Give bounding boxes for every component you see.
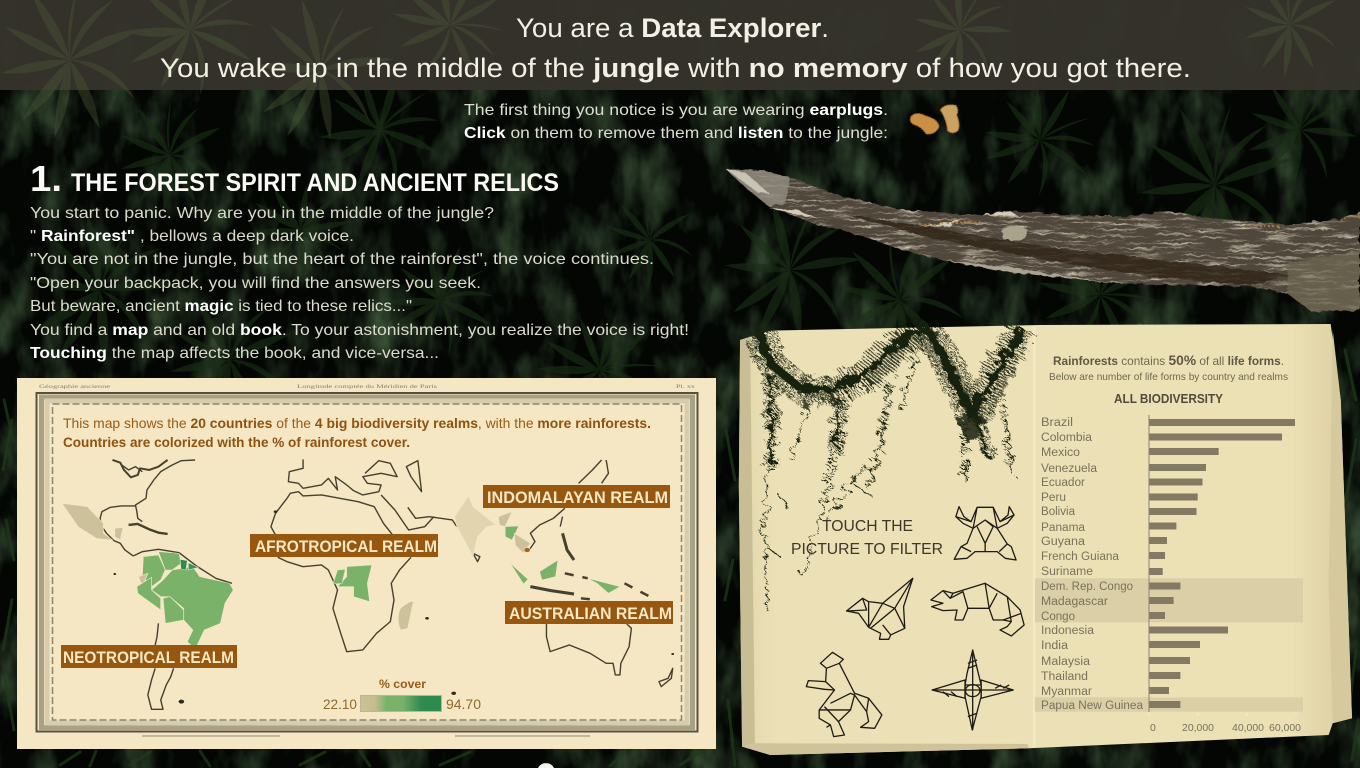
country labels: Madagascar xyxy=(1041,596,1108,608)
country labels: Suriname xyxy=(1041,566,1093,578)
country labels: Colombia xyxy=(1041,432,1093,444)
value axis: 40,000 xyxy=(1232,722,1264,734)
story text: You find a map and an old book. To your astonishment, you realize the voice is right! xyxy=(30,322,689,339)
country labels: Mexico xyxy=(1041,447,1080,459)
map intro text: This map shows the 20 countries of the 4 big biodiversity realms, with the more rainforests. xyxy=(63,415,651,431)
countries xyxy=(62,496,620,649)
world map xyxy=(62,459,674,709)
value axis: 60,000 xyxy=(1269,722,1301,734)
value axis: 0 xyxy=(1150,722,1156,734)
country labels: French Guiana xyxy=(1041,551,1120,563)
story text xyxy=(30,205,689,362)
story text: You start to panic. Why are you in the middle of the jungle? xyxy=(30,205,494,222)
value axis xyxy=(1149,713,1301,734)
story text: "You are not in the jungle, but the heart of the rainforest", the voice continues. xyxy=(30,251,654,268)
title xyxy=(160,13,1191,83)
book heading: Rainforests contains 50% of all life forms. xyxy=(1053,352,1284,368)
intro text: earplugs xyxy=(464,102,888,142)
title: You are a Data Explorer. xyxy=(516,13,829,43)
country labels: Ecuador xyxy=(1041,477,1085,489)
intro text: earplugs: The first thing you notice is you are wearing earplugs . xyxy=(464,102,888,119)
country labels: Myanmar xyxy=(1041,686,1092,698)
icon: origami gorilla xyxy=(806,652,882,737)
legend: % cover: 94.70 xyxy=(446,697,481,712)
hanging moss xyxy=(754,327,1021,613)
story text: " Rainforest" , bellows a deep dark voice. xyxy=(30,228,354,245)
touch prompt xyxy=(791,518,943,558)
legend: % cover: % cover xyxy=(379,677,426,691)
country labels: Thailand xyxy=(1041,671,1088,683)
touch prompt: TOUCH THE xyxy=(822,518,913,535)
story text: But beware, ancient magic is tied to these relics..." xyxy=(30,298,412,315)
country labels: Malaysia xyxy=(1041,656,1091,668)
intro text: earplugs: Click on them to remove them and listen to the jungle: xyxy=(464,125,888,142)
section heading xyxy=(30,158,559,199)
country labels: Bolivia xyxy=(1041,506,1076,518)
bar chart: life forms by country xyxy=(1041,415,1301,734)
origami animals xyxy=(806,507,1024,737)
panel: open book xyxy=(726,169,1360,755)
panel: antique map xyxy=(17,378,716,749)
map intro text xyxy=(63,415,651,450)
icon: earplugs xyxy=(910,105,959,134)
map intro text: Countries are colorized with the % of rainforest cover. xyxy=(63,434,410,450)
legend: % cover xyxy=(323,677,481,712)
bars xyxy=(1149,419,1295,708)
country labels: Panama xyxy=(1041,522,1086,534)
label: neotropical realm: NEOTROPICAL REALM xyxy=(63,648,234,667)
icon: origami frog xyxy=(954,507,1016,560)
book heading: ALL BIODIVERSITY xyxy=(1114,391,1223,406)
title: You wake up in the middle of the jungle with no memory of how you got there. xyxy=(160,53,1191,83)
country labels: Indonesia xyxy=(1041,625,1095,637)
icon: origami bird xyxy=(847,578,913,639)
legend: % cover: 22.10 xyxy=(323,697,357,712)
country labels: Venezuela xyxy=(1041,463,1098,475)
story text: "Open your backpack, you will find the answers you seek. xyxy=(30,275,481,292)
section heading: THE FOREST SPIRIT AND ANCIENT RELICS xyxy=(71,169,559,197)
label: australian realm: AUSTRALIAN REALM xyxy=(509,604,672,623)
upper branch xyxy=(726,169,1360,312)
country labels: Dem. Rep. Congo xyxy=(1041,581,1133,593)
book heading: Below are number of life forms by country and realms xyxy=(1049,371,1288,383)
map header engraving text: Longitude comptée du Méridien de Paris xyxy=(297,384,437,390)
map header engraving text xyxy=(39,384,695,390)
icon: origami crocodile xyxy=(932,650,1013,730)
country labels: Guyana xyxy=(1041,536,1086,548)
header band xyxy=(0,0,1360,170)
play marker xyxy=(538,763,554,768)
book heading xyxy=(1049,352,1288,406)
value axis: 20,000 xyxy=(1182,722,1214,734)
country labels: Brazil xyxy=(1041,417,1073,429)
icon: origami chameleon xyxy=(931,583,1024,636)
coastlines xyxy=(100,459,673,709)
country labels: India xyxy=(1041,640,1069,652)
country labels xyxy=(1041,417,1144,712)
touch prompt: PICTURE TO FILTER xyxy=(791,541,943,558)
label: afrotropical realm: AFROTROPICAL REALM xyxy=(255,537,437,556)
map header engraving text: Géographie ancienne xyxy=(39,384,111,390)
edge foliage strokes xyxy=(3,350,1358,766)
country labels: Peru xyxy=(1041,492,1066,504)
story text: Touching the map affects the book, and vice-versa... xyxy=(30,345,439,362)
highlight bands: realms xyxy=(1035,578,1303,712)
map header engraving text: Pl. xx xyxy=(676,384,695,390)
label: indomalayan realm: INDOMALAYAN REALM xyxy=(487,488,668,507)
section heading: 1. xyxy=(30,158,62,199)
country labels: Papua New Guinea xyxy=(1041,700,1144,712)
country labels: Congo xyxy=(1041,611,1075,623)
